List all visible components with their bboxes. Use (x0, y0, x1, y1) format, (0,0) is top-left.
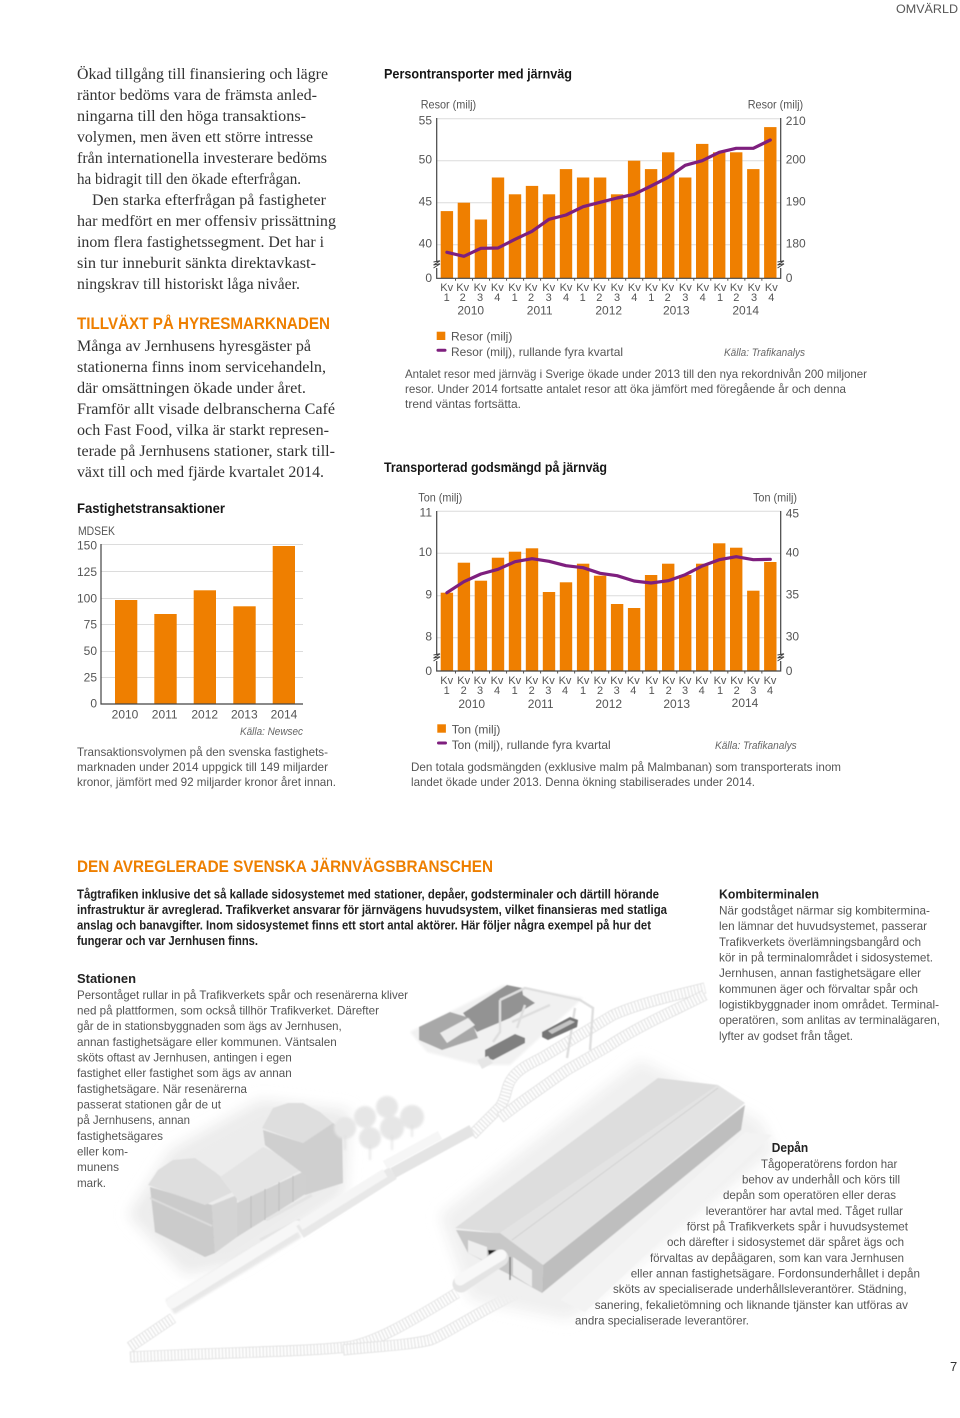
quarter labels: 2 (666, 685, 672, 697)
caption: godsmängd: Den totala godsmängden (exklusive malm på Malmbanan) som transporterats inom (411, 760, 841, 774)
chart title: Persontransporter med järnväg (384, 66, 572, 82)
legend: Ton (milj) (452, 722, 500, 736)
chart title: Fastighetstransaktioner (77, 500, 226, 516)
left axis labels: 0 (425, 271, 432, 285)
year labels (458, 696, 759, 711)
quarter labels: Kv (679, 675, 692, 687)
caption: Persontransporter (405, 367, 867, 411)
quarter labels: 2 (529, 685, 535, 697)
source: Källa: Trafikanalys (724, 347, 805, 359)
bars (115, 546, 295, 704)
text block: Stationen: ned på plattformen, som också tillhör Trafikverket. Därefter (77, 1004, 379, 1018)
quarter labels: Kv (542, 282, 556, 294)
quarter labels: 2 (460, 292, 466, 304)
x axis labels: 2011 (152, 708, 178, 722)
text block: Depån: andra specialiserade leverantörer. (575, 1314, 749, 1328)
quarter labels: Kv (576, 282, 590, 294)
quarter labels: 3 (614, 292, 620, 304)
text block: Stationen: fastighetsägares (77, 1129, 163, 1143)
caption: Persontransporter: trend väntas fortsätta. (405, 397, 521, 411)
quarter labels: Kv (696, 282, 710, 294)
text block: Depån: eller annan fastighetsägare. Fordonsunderhållet i depån (631, 1266, 920, 1280)
illustration: railway landscape (128, 985, 775, 1357)
text block: Stationen: Persontåget rullar in på Trafikverkets spår och resenärerna kliver (77, 988, 408, 1002)
quarter labels: 4 (631, 292, 637, 304)
quarter labels: Kv (611, 282, 624, 294)
chart: Transporterad godsmängd på järnväg (384, 459, 799, 752)
legend: Ton (milj), rullande fyra kvartal (452, 738, 611, 752)
year labels: 2014 (732, 304, 759, 318)
text block: Depån: först på Trafikverkets spår i huvudsystemet (687, 1220, 909, 1234)
quarter labels: 2 (528, 292, 534, 304)
text block: Depån: förvaltas av depåägaren, som kan vara Jernhusen (650, 1251, 904, 1265)
right axis labels: 0 (786, 664, 793, 678)
caption: godsmängd: landet ökade under 2013. Denna ökning stabiliserades under 2014. (411, 775, 755, 789)
text block: Stationen: på Jernhusens, annan (77, 1113, 190, 1127)
chart: Fastighetstransaktioner (77, 500, 303, 738)
intro paragraph: Tågtrafiken inklusive det så kallade sidosystemet med stationer, depåer, godsterminaler och därtill hörande (77, 888, 659, 902)
chart title: Transporterad godsmängd på järnväg (384, 459, 607, 475)
text block: Kombiterminalen: len lämnar det huvudsystemet, passerar (719, 919, 927, 933)
text block: hyresmarknaden: stationerna finns inom servicehandeln, (77, 359, 326, 376)
year labels: 2010 (457, 304, 484, 318)
quarter labels: 1 (717, 292, 723, 304)
quarter labels: 2 (596, 292, 602, 304)
left axis labels: 50 (419, 152, 432, 166)
text block: Stationen: fastighet eller fastighet som ägs av annan (77, 1066, 292, 1080)
quarter labels: Kv (457, 675, 471, 687)
quarter labels: Kv (559, 675, 572, 687)
x axis labels (112, 708, 298, 722)
quarter labels: Kv (747, 675, 760, 687)
heading: Stationen: Stationen (77, 972, 136, 986)
illustration: kombiterminal (410, 985, 593, 1069)
text block: Kombiterminalen: kommunen äger och förvaltar spår och (719, 982, 918, 996)
legend (437, 722, 611, 752)
right axis labels: 210 (786, 114, 806, 128)
quarter labels (440, 675, 777, 697)
year labels: 2010 (458, 697, 485, 711)
quarter labels: 4 (700, 292, 706, 304)
text block: Stationen: går de in stationsbyggnaden som ägs av Jernhusen, (77, 1019, 342, 1033)
right axis labels (786, 114, 806, 285)
year labels: 2012 (595, 697, 622, 711)
intro paragraph: fungerar och var Jernhusen finns. (77, 934, 258, 948)
quarter labels: Kv (627, 675, 640, 687)
legend: Resor (milj), rullande fyra kvartal (451, 345, 623, 359)
quarter labels: Kv (661, 282, 675, 294)
quarter labels: Kv (610, 675, 624, 687)
x axis labels: 2010 (112, 708, 139, 722)
caption: godsmängd (411, 760, 841, 789)
quarter labels (440, 282, 778, 304)
left axis labels: 10 (419, 545, 432, 559)
heading: Depån: Depån (772, 1141, 808, 1155)
text block: intro: ha bidragit till den ökade efterfrågan. (77, 171, 301, 188)
quarter labels: Kv (491, 282, 504, 294)
text block: intro: ningarna till den höga transaktions- (77, 108, 306, 125)
text block: Kombiterminalen: När godståget närmar sig kombitermina- (719, 904, 930, 918)
text block: intro: inom flera fastighetssegment. Det har i (77, 234, 325, 251)
chart: Persontransporter med järnväg (384, 66, 806, 359)
quarter labels: 3 (682, 685, 688, 697)
quarter labels: 3 (682, 292, 688, 304)
text block: hyresmarknaden: och Fast Food, vilka är starkt represen- (77, 422, 329, 439)
text block: hyresmarknaden (77, 338, 335, 481)
text block: Depån: sköts av specialiserade underhållsleverantörer. Städning, (613, 1282, 907, 1296)
quarter labels: 1 (512, 292, 518, 304)
quarter labels: 4 (768, 292, 774, 304)
right axis labels: 30 (786, 630, 799, 644)
text block: Depån (575, 1141, 920, 1328)
chart: Transporterad godsmängd på järnväg: Ton (milj) (753, 490, 797, 504)
quarter labels: 4 (494, 292, 500, 304)
quarter labels: Kv (525, 675, 539, 687)
left axis labels: 40 (419, 236, 432, 250)
right axis labels: 180 (786, 236, 806, 250)
text block: hyresmarknaden: växt till och med fjärde kvartalet 2014. (77, 464, 324, 481)
quarter labels: 3 (477, 292, 483, 304)
text block: intro: Ökad tillgång till finansiering och lägre (77, 66, 328, 83)
axis titles: Resor (milj) (421, 98, 476, 112)
quarter labels: 3 (750, 685, 756, 697)
quarter labels: 4 (563, 292, 569, 304)
right axis labels: 200 (786, 152, 806, 166)
y axis labels: 0 (90, 696, 97, 710)
left axis labels (419, 506, 432, 678)
text block: Kombiterminalen: operatören, som anlitas av terminalägaren, (719, 1013, 940, 1027)
right axis labels: 35 (786, 588, 799, 602)
text block: intro: sin tur inneburit sänkta direktavkast- (77, 255, 316, 272)
illustration: passenger train and platform (170, 1130, 472, 1307)
quarter labels: Kv (714, 282, 727, 294)
page number: 7 (950, 1359, 957, 1374)
illustration: depot building (440, 1060, 775, 1320)
right axis labels (786, 506, 799, 678)
x axis labels: 2012 (191, 708, 218, 722)
y axis labels: 50 (84, 644, 97, 658)
quarter labels: 1 (580, 685, 586, 697)
quarter labels: Kv (508, 282, 522, 294)
quarter labels: 1 (717, 685, 723, 697)
quarter labels: 4 (494, 685, 500, 697)
quarter labels: Kv (440, 675, 454, 687)
rolling four-quarter line (447, 140, 770, 256)
y axis labels (77, 538, 97, 710)
caption: Fastighetstransaktioner: kronor, jämfört med 92 miljarder kronor året innan. (77, 775, 336, 789)
legend (437, 330, 623, 359)
quarter labels: 4 (630, 685, 636, 697)
right axis labels: 40 (786, 546, 799, 560)
intro paragraph: infrastruktur är avreglerad. Trafikverket ansvarar för järnvägens huvudsystem, vilket finansieras med statliga (77, 903, 668, 917)
quarter labels: Kv (714, 675, 727, 687)
quarter labels: Kv (542, 675, 555, 687)
caption: Fastighetstransaktioner: marknaden under 2014 uppgick till 149 miljarder (77, 760, 328, 774)
text block: Depån: leverantörer har avtal med. Tåget rullar (706, 1204, 903, 1218)
right axis labels: 0 (786, 271, 793, 285)
text block: Kombiterminalen: kör in på terminalområdet i sidosystemet. (719, 950, 933, 964)
quarter labels: Kv (730, 675, 744, 687)
legend: Resor (milj) (451, 330, 512, 344)
illustration: trees (334, 1096, 424, 1160)
text block: hyresmarknaden: terade på Jernhusens stationer, stark till- (77, 443, 335, 460)
heading: Tillväxt på hyresmarknaden: TILLVÄXT PÅ HYRESMARKNADEN (77, 314, 330, 333)
quarter labels: 1 (648, 292, 654, 304)
quarter labels: 1 (444, 292, 450, 304)
axis breaks (433, 654, 784, 661)
text block: Depån: sanering, fekalietömning och liknande tjänster kan utföras av (595, 1298, 908, 1312)
heading: Kombiterminalen: Kombiterminalen (719, 888, 819, 902)
bars (441, 127, 776, 278)
text block: Kombiterminalen: Jernhusen, annan fastighetsägare eller (719, 966, 921, 980)
quarter labels: Kv (594, 675, 607, 687)
axis breaks (433, 261, 784, 268)
quarter labels: 2 (665, 292, 671, 304)
text block: hyresmarknaden: där omsättningen ökade under året. (77, 380, 306, 397)
chart: Persontransporter med järnväg: Resor (milj) (748, 98, 803, 112)
quarter labels: 3 (546, 292, 552, 304)
text block: Depån: depån som operatören eller deras (723, 1188, 896, 1202)
text block: Depån: Tågoperatörens fordon har (761, 1157, 897, 1171)
left axis labels (419, 114, 432, 285)
left axis labels: 9 (425, 588, 432, 602)
source: Källa: Trafikanalys (715, 740, 797, 752)
quarter labels: 1 (512, 685, 518, 697)
text block: hyresmarknaden: Framför allt visade delbranscherna Café (77, 401, 335, 418)
quarter labels: Kv (456, 282, 470, 294)
text block: intro: volymen, men även ett större intresse (77, 129, 313, 146)
right axis labels: 45 (786, 506, 799, 520)
quarter labels: 2 (597, 685, 603, 697)
quarter labels: Kv (474, 282, 487, 294)
left axis labels: 8 (425, 630, 432, 644)
caption: Persontransporter: Antalet resor med järnväg i Sverige ökade under 2013 till den nya rekordnivån 200 miljoner (405, 367, 867, 381)
text block: hyresmarknaden: Många av Jernhusens hyresgäster på (77, 338, 311, 355)
quarter labels: 4 (767, 685, 773, 697)
left axis labels: 55 (419, 114, 432, 128)
text block: Stationen: passerat stationen går de ut (77, 1098, 222, 1112)
caption: Fastighetstransaktioner: Transaktionsvolymen på den svenska fastighets- (77, 745, 328, 759)
rolling four-quarter line (447, 557, 770, 593)
bars (441, 543, 776, 671)
year labels: 2011 (527, 304, 553, 318)
quarter labels: Kv (525, 282, 538, 294)
quarter labels: 2 (461, 685, 467, 697)
quarter labels: 3 (477, 685, 483, 697)
quarter labels: Kv (645, 675, 659, 687)
axis titles: Ton (milj) (418, 490, 462, 504)
x axis labels: 2013 (231, 708, 258, 722)
quarter labels: Kv (593, 282, 606, 294)
section label: Omvärld: OMVÄRLD (896, 2, 958, 16)
text block: Stationen: mark. (77, 1176, 106, 1190)
unit label: MDSEK (78, 524, 115, 538)
year labels: 2011 (528, 697, 554, 711)
text block: intro: Den starka efterfrågan på fastigheter (92, 192, 327, 209)
text block: Stationen: munens (77, 1160, 119, 1174)
left axis labels: 11 (420, 506, 432, 520)
quarter labels: Kv (577, 675, 590, 687)
quarter labels: Kv (474, 675, 487, 687)
quarter labels: Kv (440, 282, 454, 294)
year labels: 2012 (595, 304, 622, 318)
quarter labels: Kv (508, 675, 522, 687)
quarter labels: 2 (734, 685, 740, 697)
quarter labels: Kv (765, 282, 778, 294)
text block: intro: räntor bedöms vara de främsta anled- (77, 87, 317, 104)
illustration: station building (128, 1100, 350, 1275)
text block: Depån: och därefter i sidosystemet där spåret ägs och (667, 1235, 904, 1249)
text block: Kombiterminalen: Trafikverkets överlämningsbangård och (719, 935, 921, 949)
year labels: 2013 (663, 697, 690, 711)
text block: Stationen: sköts oftast av Jernhusen, antingen i egen (77, 1050, 292, 1064)
text block: Depån: behov av underhåll och körs till (742, 1172, 900, 1186)
intro paragraph (77, 888, 668, 948)
caption: Fastighetstransaktioner (77, 745, 336, 789)
text block: Kombiterminalen: logistikbyggnader inom området. Terminal- (719, 998, 939, 1012)
y axis labels: 75 (84, 618, 97, 632)
text block: intro: från internationella investerare bedöms (77, 150, 327, 167)
left axis labels: 0 (425, 664, 432, 678)
quarter labels: Kv (491, 675, 504, 687)
quarter labels: 4 (699, 685, 705, 697)
y axis labels: 150 (77, 538, 97, 552)
caption: Persontransporter: resor. Under 2014 fortsatte antalet resor att öka jämfört med föregående år och denna (405, 382, 846, 396)
text block: Kombiterminalen: lyfter av godset från tåget. (719, 1029, 853, 1043)
y axis labels: 100 (77, 592, 97, 606)
quarter labels: 1 (444, 685, 450, 697)
right axis labels: 190 (786, 194, 806, 208)
quarter labels: 3 (751, 292, 757, 304)
text block: intro (77, 66, 336, 293)
quarter labels: Kv (764, 675, 777, 687)
illustration: rail tracks (130, 988, 705, 1357)
text block: Stationen: fastighetsägare. När resenärerna (77, 1082, 247, 1096)
quarter labels: 2 (733, 292, 739, 304)
quarter labels: 1 (649, 685, 655, 697)
quarter labels: 1 (580, 292, 586, 304)
quarter labels: Kv (695, 675, 709, 687)
left axis labels: 45 (419, 194, 432, 208)
quarter labels: Kv (645, 282, 658, 294)
quarter labels: 3 (614, 685, 620, 697)
text block: Stationen: eller kom- (77, 1144, 128, 1158)
text block: intro: ningskrav till historiskt låga nivåer. (77, 276, 300, 293)
text block: intro: har medfört en mer offensiv prissättning (77, 213, 336, 230)
quarter labels: Kv (662, 675, 676, 687)
quarter labels: Kv (730, 282, 743, 294)
year labels (457, 304, 759, 318)
x axis labels: 2014 (271, 708, 298, 722)
text block: Stationen: annan fastighetsägare eller kommunen. Väntsalen (77, 1035, 337, 1049)
year labels: 2014 (732, 696, 759, 710)
text block: Kombiterminalen (719, 888, 940, 1043)
y axis labels: 125 (77, 565, 97, 579)
year labels: 2013 (663, 304, 690, 318)
quarter labels: Kv (748, 282, 761, 294)
text block: Stationen (77, 972, 408, 1190)
quarter labels: 3 (545, 685, 551, 697)
heading: Den avreglerade svenska järnvägsbranschen: DEN AVREGLERADE SVENSKA JÄRNVÄGSBRANSCHEN (77, 857, 493, 876)
quarter labels: Kv (628, 282, 641, 294)
quarter labels: 4 (562, 685, 568, 697)
quarter labels: Kv (679, 282, 692, 294)
intro paragraph: anslag och banavgifter. Inom sidosystemet finns ett stort antal aktörer. Här följer några exempel på hur det (77, 918, 652, 932)
source: Källa: Newsec (240, 726, 303, 738)
y axis labels: 25 (84, 670, 97, 684)
quarter labels: Kv (560, 282, 573, 294)
